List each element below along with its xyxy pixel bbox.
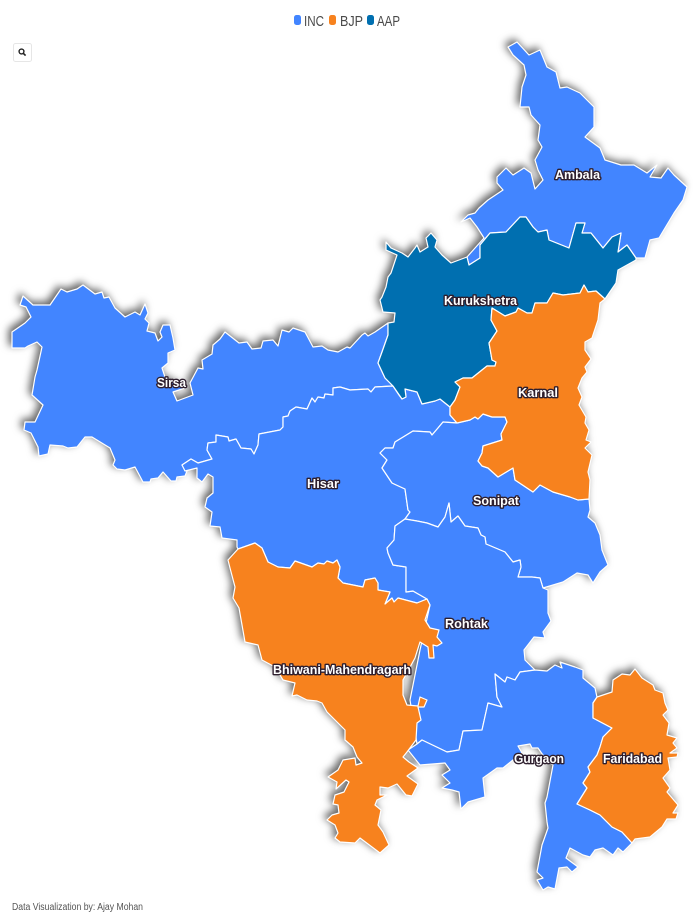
label: Gurgaon: Gurgaon [514, 752, 564, 766]
label: Rohtak: Rohtak [445, 617, 488, 631]
label: Karnal: Karnal [518, 386, 558, 400]
label: Ambala: Ambala [555, 168, 601, 182]
label: Sirsa: Sirsa [157, 376, 187, 390]
region: Bhiwani-Mahendragarh (BJP) [228, 543, 442, 853]
region: Kurukshetra (AAP) [378, 217, 636, 407]
credit text: Data Visualization by: Ajay Mohan [12, 902, 143, 913]
region: Hisar (INC) [182, 386, 457, 604]
legend item: INC: INC [304, 13, 324, 30]
label: Faridabad: Faridabad [603, 752, 662, 766]
region: Ambala (INC) [461, 42, 687, 265]
label: Sonipat: Sonipat [473, 494, 520, 508]
region: Sirsa (INC) [12, 285, 393, 482]
legend [294, 13, 400, 30]
icon: search button [14, 44, 32, 62]
legend item: AAP: AAP [377, 13, 400, 30]
label: Hisar: Hisar [307, 477, 339, 491]
label: Kurukshetra: Kurukshetra [444, 294, 518, 308]
label: Bhiwani-Mahendragarh: Bhiwani-Mahendragarh [273, 663, 411, 677]
region: Sonipat (INC) [380, 414, 608, 588]
region: Faridabad (BJP) [577, 669, 678, 843]
legend item: BJP: BJP [340, 13, 363, 30]
region: Karnal (BJP) [450, 285, 605, 500]
region: Rohtak (INC) [387, 503, 551, 752]
region: Gurgaon (INC) [408, 662, 632, 890]
